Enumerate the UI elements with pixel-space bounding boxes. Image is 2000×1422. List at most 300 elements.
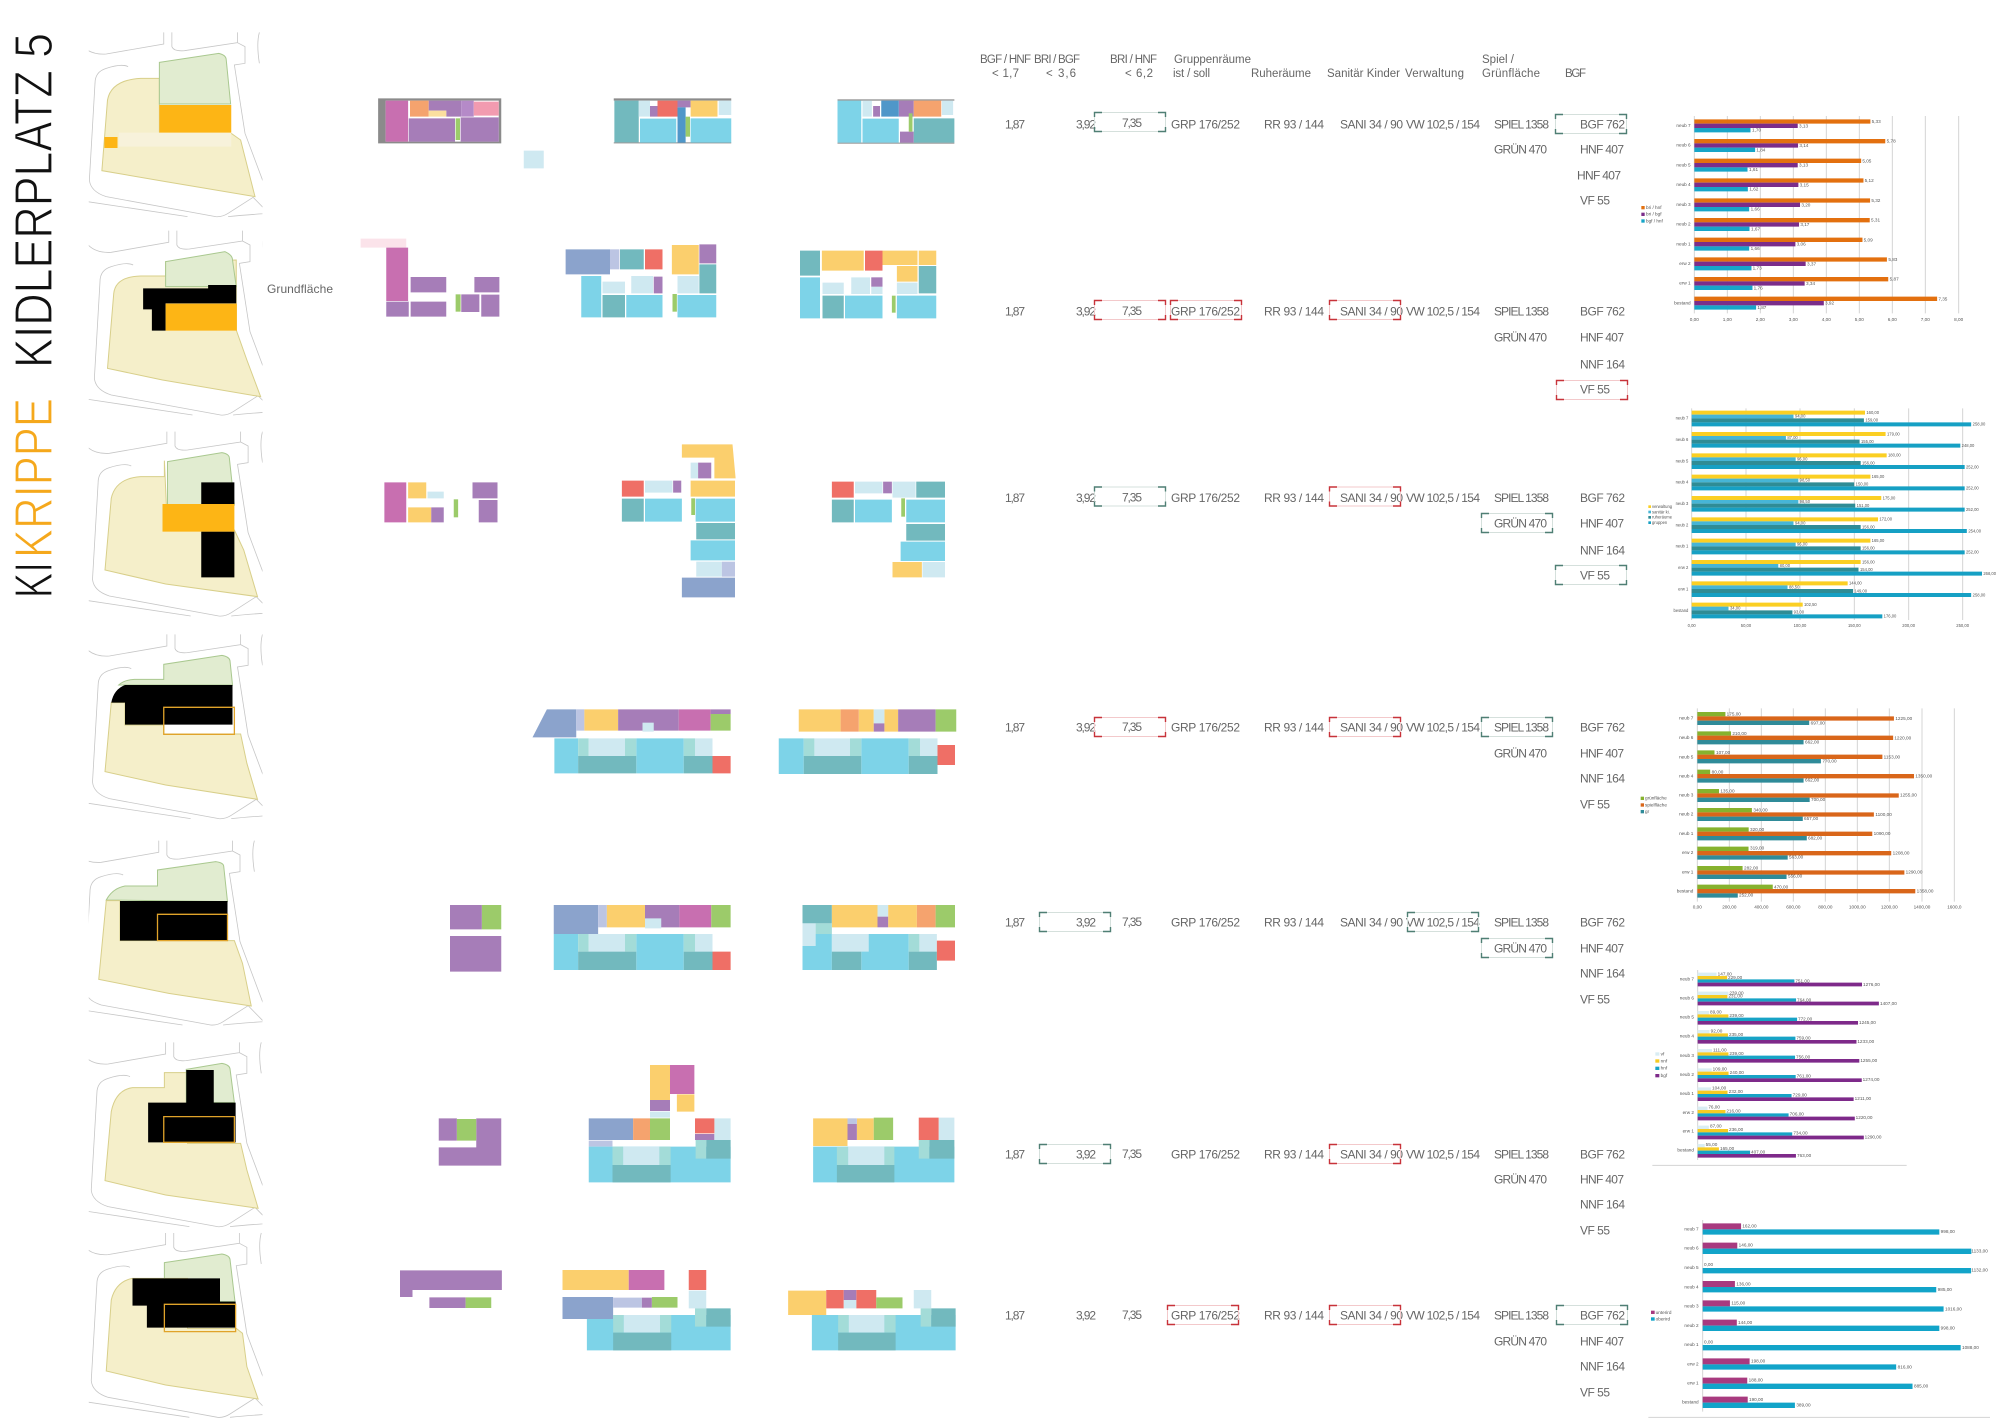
data row 6: GRP 176/252 <box>1171 1148 1240 1162</box>
chart 2: room areas: 165,00 <box>1872 538 1885 543</box>
data row 7: 3,92 <box>1076 1308 1096 1322</box>
chart 2: room areas: 96,00 <box>1797 542 1808 547</box>
data row 5: SANI 34 / 90 <box>1340 916 1403 930</box>
chart 4: vf, nnf, hnf, bgf: neub 5 <box>1680 1015 1694 1020</box>
chart 4: vf, nnf, hnf, bgf: 236,00 <box>1729 1127 1744 1132</box>
chart 4: vf, nnf, hnf, bgf: 109,00 <box>1713 1067 1727 1072</box>
chart 4: vf, nnf, hnf, bgf: 1211,00 <box>1855 1096 1872 1101</box>
chart 3: green and play areas: neub 6 <box>1679 735 1694 740</box>
floor plans row 7 <box>400 1270 956 1350</box>
data row 2: RR 93 / 144 <box>1264 304 1324 318</box>
chart 3: green and play areas: grünfläche <box>1645 796 1667 801</box>
chart 1: ratios bri/hnf, bri/bgf, bgf/hnf: 0,00 <box>1690 317 1699 322</box>
data row 5: HNF 407 <box>1580 942 1624 956</box>
chart 2: room areas: 98,50 <box>1800 478 1811 483</box>
chart 1: ratios bri/hnf, bri/bgf, bgf/hnf: bri / hnf <box>1646 205 1662 210</box>
data row 3: RR 93 / 144 <box>1264 491 1324 505</box>
data row 6 <box>1005 1144 1625 1238</box>
chart 4: vf, nnf, hnf, bgf: hnf <box>1661 1066 1668 1071</box>
chart 5: oberird and unterird: 115,00 <box>1731 1301 1746 1306</box>
chart 3: green and play areas: 1400,00 <box>1914 904 1931 909</box>
chart 5: oberird and unterird: neub 2 <box>1684 1323 1699 1328</box>
chart 1: ratios bri/hnf, bri/bgf, bgf/hnf: 8,00 <box>1954 317 1964 322</box>
data row 3: BGF 762 <box>1580 491 1625 505</box>
data row 1: SPIEL 1358 <box>1494 118 1549 132</box>
data row 4: NNF 164 <box>1580 772 1625 786</box>
chart 3: green and play areas: 400,00 <box>1754 904 1769 909</box>
chart 2: room areas: 88,50 <box>1789 584 1800 589</box>
data row 7: VF 55 <box>1580 1386 1610 1400</box>
chart 4: vf, nnf, hnf, bgf: 111,00 <box>1713 1048 1727 1053</box>
data row 1: HNF 407 <box>1577 168 1621 182</box>
chart 1: ratios bri/hnf, bri/bgf, bgf/hnf: 1,84 <box>1756 147 1766 152</box>
chart 4: vf, nnf, hnf, bgf: 772,00 <box>1798 1016 1813 1021</box>
column headings: Grünfläche <box>1482 68 1540 80</box>
chart 4: vf, nnf, hnf, bgf: 231,00 <box>1728 994 1743 999</box>
chart 5: oberird and unterird: neub 7 <box>1684 1226 1699 1231</box>
chart 1: ratios bri/hnf, bri/bgf, bgf/hnf: 5,05 <box>1862 158 1872 163</box>
chart 1: ratios bri/hnf, bri/bgf, bgf/hnf: 3,14 <box>1799 143 1809 148</box>
data row 3: VF 55 <box>1580 568 1610 582</box>
chart 2: room areas: gruppen <box>1652 520 1668 525</box>
chart 1: ratios bri/hnf, bri/bgf, bgf/hnf: 5,31 <box>1871 218 1880 223</box>
data row 1: 3,92 <box>1076 118 1096 132</box>
chart 1: ratios bri/hnf, bri/bgf, bgf/hnf: 1,61 <box>1749 167 1758 172</box>
title: vertical project name: KRIPPE <box>4 398 64 558</box>
chart 5: oberird and unterird: 1132,00 <box>1971 1268 1988 1273</box>
chart 1: ratios bri/hnf, bri/bgf, bgf/hnf: 2,00 <box>1756 317 1765 322</box>
column headings: Sanitär Kinder <box>1327 68 1400 80</box>
chart 3: green and play areas: 1600,0 <box>1947 904 1962 909</box>
chart 2: room areas: neub 3 <box>1676 501 1689 506</box>
chart 3: green and play areas: 770,00 <box>1822 759 1837 764</box>
column headings: < 6,2 <box>1125 68 1153 80</box>
column headings: Spiel / <box>1482 54 1515 66</box>
chart 4: vf, nnf, hnf, bgf: 1276,00 <box>1863 982 1880 987</box>
chart 1: ratios bri/hnf, bri/bgf, bgf/hnf: 7,00 <box>1921 317 1930 322</box>
chart 2: room areas: ruheräume <box>1652 515 1673 520</box>
chart 2: room areas: 150,00 <box>1856 482 1869 487</box>
chart 1: ratios bri/hnf, bri/bgf, bgf/hnf: 3,34 <box>1806 281 1815 286</box>
data row 2: 3,92 <box>1076 304 1096 318</box>
chart 2: room areas: 50,00 <box>1741 623 1752 628</box>
chart 1: ratios bri/hnf, bri/bgf, bgf/hnf: bri / bgf <box>1646 212 1662 217</box>
chart 4: vf, nnf, hnf, bgf: 165,00 <box>1720 1146 1735 1151</box>
floor plans row 5 <box>450 905 955 972</box>
chart 4: vf, nnf, hnf, bgf: bgf <box>1661 1073 1668 1078</box>
site plan 1 <box>83 32 269 217</box>
data row 7: 1,87 <box>1005 1308 1025 1322</box>
data row 7 <box>1005 1306 1628 1400</box>
chart 1: ratios bri/hnf, bri/bgf, bgf/hnf: 3,13 <box>1799 123 1808 128</box>
chart 5: oberird and unterird: 1088,00 <box>1962 1345 1979 1350</box>
data row 5: 1,87 <box>1005 916 1025 930</box>
chart 2: room areas: 172,00 <box>1879 517 1893 522</box>
chart 2: room areas: 100,00 <box>1794 623 1807 628</box>
chart 4: vf, nnf, hnf, bgf: 235,00 <box>1729 1032 1744 1037</box>
site plan 5 <box>78 841 264 1025</box>
chart 3: green and play areas: 210,00 <box>1732 731 1747 736</box>
data row 6: GRÜN 470 <box>1494 1172 1547 1186</box>
column headings: Verwaltung <box>1405 68 1464 80</box>
chart 3: green and play areas: 1000,00 <box>1849 904 1866 909</box>
chart 4: vf, nnf, hnf, bgf: 1274,00 <box>1863 1077 1880 1082</box>
chart 1: ratios bri/hnf, bri/bgf, bgf/hnf: bgf / hnf <box>1646 218 1664 223</box>
data row 6: HNF 407 <box>1580 1172 1624 1186</box>
chart 1: ratios bri/hnf, bri/bgf, bgf/hnf: 1,62 <box>1749 187 1759 192</box>
chart 4: vf, nnf, hnf, bgf: 1233,00 <box>1857 1039 1875 1044</box>
chart 2: room areas: 160,00 <box>1866 410 1880 415</box>
site plan 4 <box>86 634 272 819</box>
data row 3: HNF 407 <box>1580 516 1624 530</box>
chart 3: green and play areas: 470,00 <box>1774 884 1789 889</box>
chart 4: vf, nnf, hnf, bgf: 1220,00 <box>1856 1115 1873 1120</box>
data row 5 <box>1005 912 1625 1006</box>
chart 3: green and play areas <box>1641 708 1962 909</box>
chart 2: room areas: sanitär ki. <box>1652 509 1670 514</box>
chart 2: room areas: 248,00 <box>1962 443 1975 448</box>
data row 5: RR 93 / 144 <box>1264 916 1324 930</box>
chart 3: green and play areas: gr <box>1645 809 1650 814</box>
chart 3: green and play areas: neub 4 <box>1679 773 1694 778</box>
chart 2: room areas: 200,00 <box>1902 623 1916 628</box>
data row 7: VW 102,5 / 154 <box>1406 1308 1480 1322</box>
chart 1: ratios bri/hnf, bri/bgf, bgf/hnf: 5,33 <box>1872 119 1881 124</box>
chart 3: green and play areas: 135,00 <box>1720 789 1735 794</box>
chart 4: vf, nnf, hnf, bgf: 147,00 <box>1718 972 1732 977</box>
chart 5: oberird and unterird: 162,00 <box>1742 1223 1757 1228</box>
chart 5: oberird and unterird: 985,00 <box>1938 1287 1952 1292</box>
data row 1: SANI 34 / 90 <box>1340 118 1403 132</box>
chart 2: room areas: 179,00 <box>1887 431 1900 436</box>
chart 5: oberird and unterird: 146,00 <box>1739 1243 1753 1248</box>
data row 4: GRP 176/252 <box>1171 720 1240 734</box>
data row 4: 7,35 <box>1122 720 1142 734</box>
data row 1: 7,35 <box>1122 116 1142 130</box>
data row 3: GRP 176/252 <box>1171 491 1240 505</box>
chart 4: vf, nnf, hnf, bgf: 104,00 <box>1712 1086 1727 1091</box>
chart 2: room areas: 154,00 <box>1860 567 1873 572</box>
chart 3: green and play areas: spielfläche <box>1645 802 1667 807</box>
chart 3: green and play areas: 1100,00 <box>1875 812 1892 817</box>
title: vertical project name <box>4 33 64 598</box>
chart 1: ratios bri/hnf, bri/bgf, bgf/hnf: 5,78 <box>1887 139 1896 144</box>
chart 1: ratios bri/hnf, bri/bgf, bgf/hnf: 3,06 <box>1797 242 1806 247</box>
data row 2: GRP 176/252 <box>1171 304 1240 318</box>
chart 3: green and play areas: neub 2 <box>1679 812 1694 817</box>
column headings: < 3,6 <box>1046 68 1076 80</box>
chart 2: room areas: 258,00 <box>1973 422 1986 427</box>
chart 3: green and play areas: 657,00 <box>1804 816 1819 821</box>
data row 1: BGF 762 <box>1580 118 1625 132</box>
data row 1: VF 55 <box>1580 194 1610 208</box>
data row 6: NNF 164 <box>1580 1198 1625 1212</box>
chart 2: room areas: 250,00 <box>1956 623 1970 628</box>
chart 5: oberird and unterird: 389,00 <box>1796 1403 1811 1408</box>
chart 4: vf, nnf, hnf, bgf <box>1652 970 1907 1165</box>
chart 2: room areas: 252,00 <box>1966 507 1979 512</box>
data row 3: 1,87 <box>1005 491 1025 505</box>
chart 1: ratios bri/hnf, bri/bgf, bgf/hnf: 3,15 <box>1800 182 1809 187</box>
chart 4: vf, nnf, hnf, bgf: 1245,00 <box>1859 1020 1876 1025</box>
chart 1: ratios bri/hnf, bri/bgf, bgf/hnf: bestand <box>1674 300 1691 305</box>
chart 1: ratios bri/hnf, bri/bgf, bgf/hnf: 5,00 <box>1855 317 1864 322</box>
chart 1: ratios bri/hnf, bri/bgf, bgf/hnf: 3,00 <box>1789 317 1798 322</box>
column headings: ist / soll <box>1173 68 1210 80</box>
chart 3: green and play areas: 800,00 <box>1818 904 1833 909</box>
data row 6: SPIEL 1358 <box>1494 1148 1549 1162</box>
chart 3: green and play areas: 1358,00 <box>1917 889 1934 894</box>
chart 3: green and play areas: 340,00 <box>1753 808 1768 813</box>
chart 1: ratios bri/hnf, bri/bgf, bgf/hnf: neub 3 <box>1676 202 1691 207</box>
data row 4: GRÜN 470 <box>1494 746 1547 760</box>
chart 4: vf, nnf, hnf, bgf: 1407,00 <box>1880 1001 1897 1006</box>
data row 5: 7,35 <box>1122 915 1142 929</box>
chart 5: oberird and unterird: 198,00 <box>1751 1359 1766 1364</box>
chart 2: room areas: 87,00 <box>1787 435 1798 440</box>
chart 4: vf, nnf, hnf, bgf: erw 2 <box>1683 1110 1694 1115</box>
chart 2: room areas: 252,00 <box>1966 550 1979 555</box>
data row 2: NNF 164 <box>1580 358 1625 372</box>
chart 3: green and play areas: 80,00 <box>1712 769 1724 774</box>
chart 2: room areas: neub 2 <box>1676 522 1689 527</box>
data row 7: GRÜN 470 <box>1494 1334 1547 1348</box>
chart 3: green and play areas: 1153,00 <box>1884 754 1901 759</box>
data row 3: SPIEL 1358 <box>1494 491 1549 505</box>
chart 4: vf, nnf, hnf, bgf: 239,00 <box>1729 1013 1744 1018</box>
chart 2: room areas: 254,00 <box>1968 528 1982 533</box>
chart 2: room areas: 159,00 <box>1865 418 1879 423</box>
chart 2: room areas: 144,00 <box>1849 581 1862 586</box>
chart 3: green and play areas: 0,00 <box>1693 904 1702 909</box>
chart 4: vf, nnf, hnf, bgf: 216,00 <box>1726 1108 1741 1113</box>
title: vertical project name: KI <box>4 562 64 598</box>
data row 3: SANI 34 / 90 <box>1340 491 1403 505</box>
chart 2: room areas: 176,00 <box>1884 614 1897 619</box>
data row 6: VW 102,5 / 154 <box>1406 1148 1480 1162</box>
chart 2: room areas: 156,00 <box>1862 559 1875 564</box>
chart 2: room areas: 150,00 <box>1848 623 1861 628</box>
data row 3: VW 102,5 / 154 <box>1406 491 1480 505</box>
chart 2: room areas: 96,00 <box>1797 456 1808 461</box>
chart 2: room areas: neub 1 <box>1676 544 1689 549</box>
chart 1: ratios bri/hnf, bri/bgf, bgf/hnf: 1,70 <box>1752 128 1761 133</box>
chart 1: ratios bri/hnf, bri/bgf, bgf/hnf <box>1641 116 1964 322</box>
data row 1: VW 102,5 / 154 <box>1406 118 1480 132</box>
data row 6: 7,35 <box>1122 1147 1142 1161</box>
chart 3: green and play areas: 175,00 <box>1727 712 1741 717</box>
chart 1: ratios bri/hnf, bri/bgf, bgf/hnf: 3,17 <box>1800 222 1810 227</box>
data row 5: SPIEL 1358 <box>1494 916 1549 930</box>
chart 5: oberird and unterird: erw 1 <box>1687 1381 1699 1386</box>
chart 1: ratios bri/hnf, bri/bgf, bgf/hnf: 3,37 <box>1807 261 1816 266</box>
data row 5: 3,92 <box>1076 916 1096 930</box>
chart 1: ratios bri/hnf, bri/bgf, bgf/hnf: 4,00 <box>1822 317 1831 322</box>
data row 5: BGF 762 <box>1580 916 1625 930</box>
chart 3: green and play areas: 700,00 <box>1811 797 1826 802</box>
site plan 7 <box>85 1233 271 1417</box>
column headings: Ruheräume <box>1251 68 1311 80</box>
chart 5: oberird and unterird: neub 1 <box>1684 1342 1699 1347</box>
chart 2: room areas: 0,00 <box>1688 623 1696 628</box>
data row 7: RR 93 / 144 <box>1264 1308 1324 1322</box>
chart 2: room areas: neub 5 <box>1676 458 1689 463</box>
chart 4: vf, nnf, hnf, bgf: 759,00 <box>1796 1035 1811 1040</box>
site plan 6 <box>85 1042 271 1227</box>
chart 5: oberird and unterird: neub 3 <box>1684 1304 1699 1309</box>
data row 2: 1,87 <box>1005 304 1025 318</box>
floor plans row 2 <box>361 239 936 318</box>
data row 6: 3,92 <box>1076 1148 1096 1162</box>
data row 3: 3,92 <box>1076 491 1096 505</box>
chart 4: vf, nnf, hnf, bgf: neub 3 <box>1680 1053 1694 1058</box>
chart 3: green and play areas: 107,00 <box>1716 750 1731 755</box>
chart 1: ratios bri/hnf, bri/bgf, bgf/hnf: 1,76 <box>1754 285 1763 290</box>
chart 2: room areas: 156,00 <box>1862 524 1875 529</box>
chart 1: ratios bri/hnf, bri/bgf, bgf/hnf: 5,09 <box>1864 237 1873 242</box>
data row 1: 1,87 <box>1005 118 1025 132</box>
column headings: BGF / HNF <box>980 54 1031 66</box>
chart 5: oberird and unterird: 1016,00 <box>1945 1306 1962 1311</box>
chart 4: vf, nnf, hnf, bgf: neub 7 <box>1680 976 1694 981</box>
data row 4: RR 93 / 144 <box>1264 720 1324 734</box>
chart 3: green and play areas: 1290,00 <box>1906 869 1923 874</box>
data row 2: SANI 34 / 90 <box>1340 304 1403 318</box>
chart 1: ratios bri/hnf, bri/bgf, bgf/hnf: 1,00 <box>1723 317 1732 322</box>
chart 1: ratios bri/hnf, bri/bgf, bgf/hnf: erw 1 <box>1679 281 1691 286</box>
data row 4: SANI 34 / 90 <box>1340 720 1403 734</box>
chart 4: vf, nnf, hnf, bgf: 232,00 <box>1729 1089 1743 1094</box>
chart 2: room areas: 94,00 <box>1795 520 1806 525</box>
chart 2: room areas: 98,50 <box>1800 499 1811 504</box>
chart 3: green and play areas: 662,00 <box>1805 739 1820 744</box>
chart 4: vf, nnf, hnf, bgf: 92,00 <box>1711 1029 1723 1034</box>
chart 5: oberird and unterird <box>1648 1220 1990 1417</box>
chart 4: vf, nnf, hnf, bgf: 76,00 <box>1708 1104 1720 1109</box>
chart 2: room areas: 268,00 <box>1983 571 1997 576</box>
chart 2: room areas: erw 1 <box>1678 586 1689 591</box>
chart 3: green and play areas: bestand <box>1677 888 1694 893</box>
chart 1: ratios bri/hnf, bri/bgf, bgf/hnf: 1,87 <box>1757 305 1767 310</box>
chart 3: green and play areas: 1220,00 <box>1894 735 1912 740</box>
chart 4: vf, nnf, hnf, bgf: 734,00 <box>1793 1131 1808 1136</box>
chart 1: ratios bri/hnf, bri/bgf, bgf/hnf: neub 2 <box>1676 222 1691 227</box>
chart 4: vf, nnf, hnf, bgf: 239,00 <box>1729 1051 1744 1056</box>
data row 7: NNF 164 <box>1580 1360 1625 1374</box>
chart 3: green and play areas: 1350,00 <box>1915 774 1933 779</box>
chart 1: ratios bri/hnf, bri/bgf, bgf/hnf: 5,87 <box>1890 277 1899 282</box>
chart 4: vf, nnf, hnf, bgf: bestand <box>1677 1148 1694 1153</box>
chart 1: ratios bri/hnf, bri/bgf, bgf/hnf: 3,20 <box>1801 202 1811 207</box>
chart 3: green and play areas: 282,00 <box>1744 865 1759 870</box>
chart 4: vf, nnf, hnf, bgf: 240,00 <box>1730 1070 1744 1075</box>
data row 5: VF 55 <box>1580 992 1610 1006</box>
chart 5: oberird and unterird: unterird <box>1656 1310 1672 1315</box>
chart 3: green and play areas: neub 7 <box>1679 716 1694 721</box>
chart 2: room areas: 93,00 <box>1794 610 1805 615</box>
data row 7: 7,35 <box>1122 1308 1142 1322</box>
chart 1: ratios bri/hnf, bri/bgf, bgf/hnf: 5,83 <box>1888 257 1898 262</box>
chart 3: green and play areas: 600,00 <box>1786 904 1801 909</box>
floor plans row 6 <box>439 1065 954 1182</box>
data row 7: BGF 762 <box>1580 1308 1625 1322</box>
column headings: BRI / HNF <box>1110 54 1157 66</box>
chart 2: room areas: neub 6 <box>1676 437 1689 442</box>
chart 5: oberird and unterird: 1133,00 <box>1971 1248 1988 1253</box>
data row 4 <box>1005 718 1625 812</box>
chart 1: ratios bri/hnf, bri/bgf, bgf/hnf: 7,35 <box>1938 296 1948 301</box>
chart 3: green and play areas: neub 3 <box>1679 793 1694 798</box>
chart 3: green and play areas: neub 5 <box>1679 754 1694 759</box>
data row 4: BGF 762 <box>1580 720 1625 734</box>
chart 2: room areas: erw 2 <box>1678 565 1689 570</box>
floor plans row 3 <box>384 444 945 597</box>
chart 4: vf, nnf, hnf, bgf: 756,00 <box>1796 1054 1811 1059</box>
chart 5: oberird and unterird: 998,00 <box>1941 1229 1955 1234</box>
chart 1: ratios bri/hnf, bri/bgf, bgf/hnf: 1,67 <box>1751 226 1760 231</box>
data row 2: VF 55 <box>1580 382 1610 396</box>
chart 3: green and play areas: 200,00 <box>1722 904 1737 909</box>
chart 2: room areas: 151,00 <box>1857 503 1870 508</box>
chart 5: oberird and unterird: neub 4 <box>1684 1284 1699 1289</box>
chart 2: room areas: 155,00 <box>1861 439 1874 444</box>
data row 2: HNF 407 <box>1580 330 1624 344</box>
chart 3: green and play areas: 662,00 <box>1805 778 1820 783</box>
chart 4: vf, nnf, hnf, bgf: 751,00 <box>1795 978 1810 983</box>
chart 3: green and play areas: erw 1 <box>1682 869 1694 874</box>
chart 4: vf, nnf, hnf, bgf: neub 4 <box>1680 1034 1694 1039</box>
chart 2: room areas: neub 7 <box>1676 416 1689 421</box>
site plans and floor plans group <box>78 32 956 1417</box>
chart 1: ratios bri/hnf, bri/bgf, bgf/hnf: 5,32 <box>1871 198 1881 203</box>
site plan 2 <box>88 231 274 415</box>
chart 4: vf, nnf, hnf, bgf: 764,00 <box>1797 997 1812 1002</box>
chart 1: ratios bri/hnf, bri/bgf, bgf/hnf: neub 4 <box>1676 182 1691 187</box>
chart 2: room areas: 252,00 <box>1966 486 1979 491</box>
data row 5: NNF 164 <box>1580 966 1625 980</box>
chart 3: green and play areas: 682,00 <box>1808 835 1823 840</box>
chart 2: room areas: 156,00 <box>1862 546 1875 551</box>
chart 3: green and play areas: 563,00 <box>1789 854 1804 859</box>
data row 4: 1,87 <box>1005 720 1025 734</box>
chart 4: vf, nnf, hnf, bgf: erw 1 <box>1683 1129 1694 1134</box>
chart 2: room areas: 175,00 <box>1883 495 1896 500</box>
column headings: Gruppenräume <box>1174 54 1251 66</box>
chart 2: room areas <box>1648 408 1997 628</box>
chart 5: oberird and unterird: 816,00 <box>1898 1364 1912 1369</box>
chart 4: vf, nnf, hnf, bgf: neub 6 <box>1680 996 1694 1001</box>
data row 7: SANI 34 / 90 <box>1340 1308 1403 1322</box>
data row 3 <box>1005 487 1626 584</box>
data row 2 <box>1005 300 1628 400</box>
chart 1: ratios bri/hnf, bri/bgf, bgf/hnf: 1,73 <box>1753 266 1762 271</box>
chart 1: ratios bri/hnf, bri/bgf, bgf/hnf: 3,92 <box>1825 301 1834 306</box>
data row 2: GRÜN 470 <box>1494 330 1547 344</box>
chart 2: room areas: 156,00 <box>1862 460 1875 465</box>
data row 1 <box>1005 112 1626 208</box>
data row 3: GRÜN 470 <box>1494 516 1547 530</box>
chart 1: ratios bri/hnf, bri/bgf, bgf/hnf: 5,12 <box>1865 178 1874 183</box>
chart 1: ratios bri/hnf, bri/bgf, bgf/hnf: 1,66 <box>1751 207 1760 212</box>
chart 1: ratios bri/hnf, bri/bgf, bgf/hnf: neub 7 <box>1676 123 1691 128</box>
column headings: < 1,7 <box>992 68 1019 80</box>
chart 5: oberird and unterird: 0,00 <box>1704 1262 1713 1267</box>
chart 2: room areas: 34,00 <box>1730 606 1741 611</box>
chart 4: vf, nnf, hnf, bgf: 89,00 <box>1710 1009 1722 1014</box>
column headings: BRI / BGF <box>1034 54 1080 66</box>
chart 5: oberird and unterird: 998,00 <box>1941 1326 1955 1331</box>
chart 4: vf, nnf, hnf, bgf: neub 2 <box>1680 1072 1694 1077</box>
